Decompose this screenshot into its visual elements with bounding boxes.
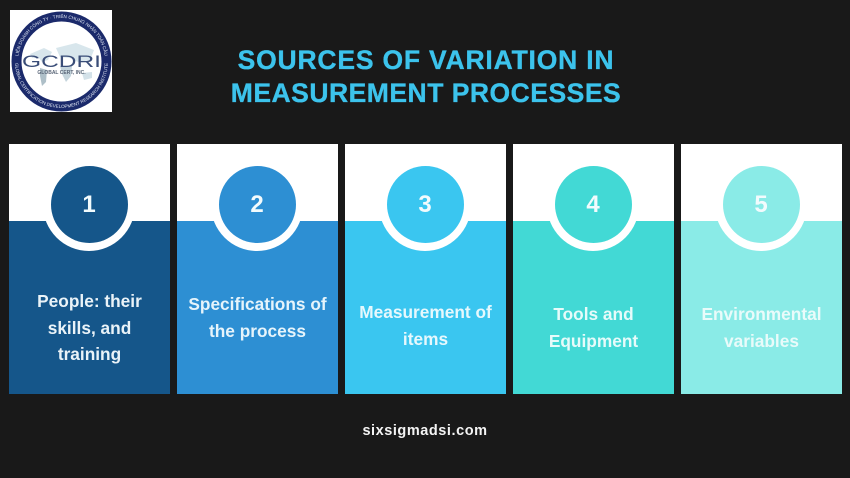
panel: card 2 specifications: 2	[250, 191, 264, 218]
panel: card 4 tools: Tools and	[553, 304, 634, 324]
panel: card 3 measurement: 3	[418, 191, 432, 218]
panel: card 4 tools: Equipment	[549, 330, 638, 350]
panel: card 5 environmental: Environmental	[701, 304, 822, 324]
title: SOURCES OF VARIATION IN	[238, 45, 614, 75]
panel: card 4 tools: 4	[586, 191, 600, 218]
logo: GCDRI seal: LIÊN DOANH CÔNG TY · TRIỂN CHUNG NHẬN TOÀN CẦU	[15, 14, 108, 56]
title	[231, 45, 621, 108]
panel: card 1 people: training	[58, 344, 121, 364]
title: MEASUREMENT PROCESSES	[231, 78, 621, 108]
panel: card 3 measurement: items	[403, 328, 448, 348]
panel: card 1 people: skills, and	[48, 318, 131, 338]
panel: card 5 environmental: variables	[724, 330, 799, 350]
panel: card 1 people	[8, 144, 170, 394]
panel: card 5 environmental: 5	[754, 191, 768, 218]
footer website: sixsigmadsi.com	[362, 423, 488, 439]
panel: card 2 specifications	[176, 144, 338, 394]
panel: card 5 environmental	[680, 144, 842, 394]
logo: GCDRI seal: GLOBAL CERT, INC.	[37, 70, 86, 76]
logo: GCDRI seal	[10, 10, 112, 112]
panel: card 2 specifications: the process	[209, 320, 306, 340]
panel: card 1 people: 1	[82, 191, 96, 218]
panel: card 2 specifications: Specifications of	[188, 294, 327, 314]
logo: GCDRI seal: GLOBAL CERTIFICATION DEVELOPMENT RESEARCH INSTITUTE	[15, 63, 108, 108]
logo: GCDRI seal: GCDRI	[22, 52, 101, 71]
panel: card 3 measurement: Measurement of	[359, 302, 492, 322]
panel: card 1 people: People: their	[37, 291, 142, 311]
panel: card 4 tools	[512, 144, 674, 394]
panel: card 3 measurement	[344, 144, 506, 394]
